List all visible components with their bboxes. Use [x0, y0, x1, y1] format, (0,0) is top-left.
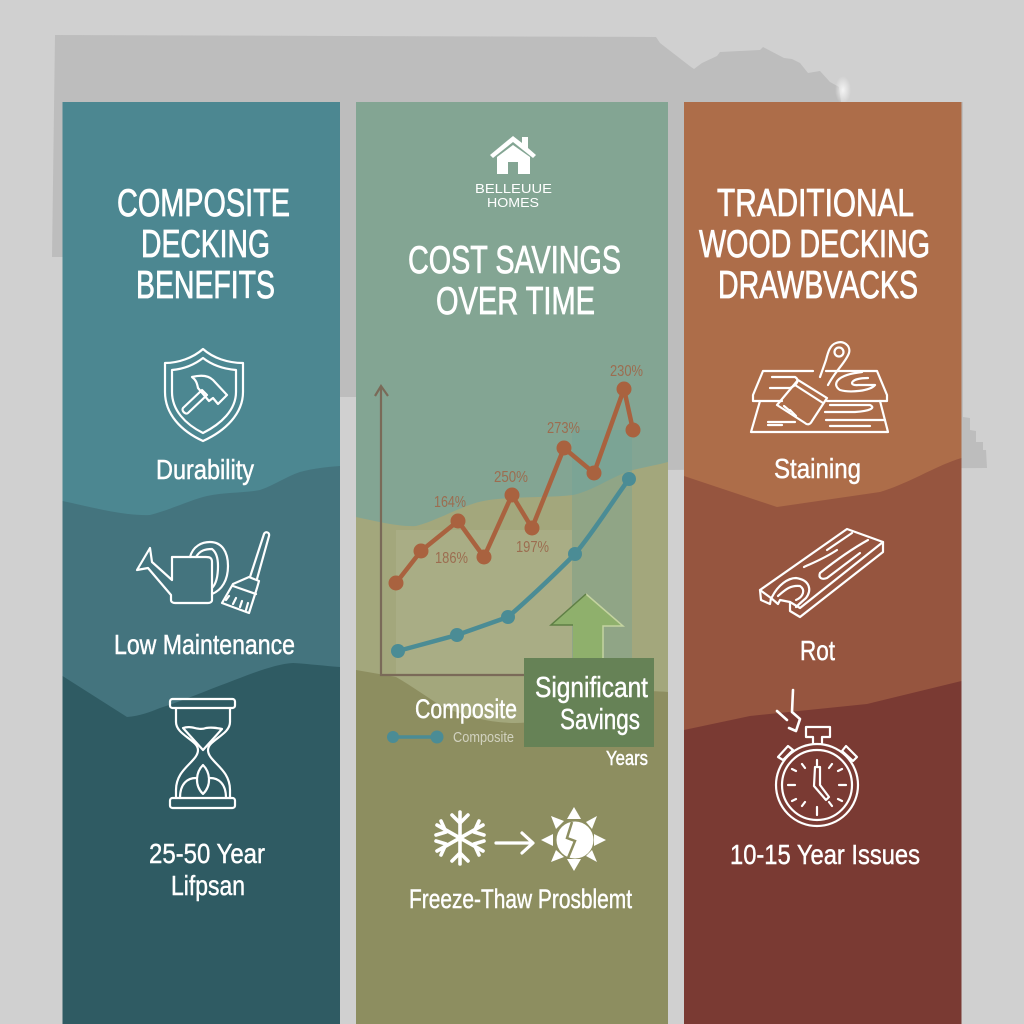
icon: shield with hammer — [165, 349, 243, 441]
logo: belleuue homes: HOMES — [487, 195, 539, 210]
data labels — [434, 363, 643, 567]
label: staining: Staining — [774, 453, 861, 484]
legend: composite: Composite — [415, 694, 517, 724]
data labels: 230% — [610, 363, 643, 380]
callout: significant savings: Savings — [560, 704, 640, 736]
callout: significant savings — [524, 658, 654, 747]
heading: cost savings over time: COST SAVINGS — [408, 239, 621, 282]
icon: stopwatch with crack — [776, 690, 858, 826]
icon: watering can and broom — [137, 532, 269, 613]
data labels: 197% — [516, 539, 549, 556]
heading: cost savings over time — [408, 239, 621, 323]
label: lifespan: Lifpsan — [171, 870, 245, 901]
heading: traditional wood decking drawbacks: TRADITIONAL — [717, 182, 914, 225]
legend: composite: Composite — [453, 729, 514, 746]
icon: cracked sun — [541, 807, 606, 871]
axis label: years: Years — [606, 748, 648, 770]
label: rot: Rot — [800, 635, 835, 666]
arrow: freeze to thaw — [496, 833, 533, 853]
label: lifespan: 25-50 Year — [149, 838, 265, 869]
background map silhouette — [52, 35, 987, 470]
heading: traditional wood decking drawbacks: WOOD DECKING — [699, 223, 930, 266]
chart axes — [375, 386, 526, 675]
heading: cost savings over time: OVER TIME — [436, 280, 595, 323]
panel: composite decking benefits — [62, 102, 340, 1024]
line: wood cost — [388, 382, 640, 590]
heading: composite decking benefits: COMPOSITE — [117, 182, 290, 225]
chart: cost over time lines — [375, 363, 643, 675]
label: issues: 10-15 Year Issues — [730, 839, 920, 870]
heading: traditional wood decking drawbacks — [699, 182, 930, 307]
line: composite cost — [391, 472, 636, 658]
heading: composite decking benefits — [117, 182, 290, 307]
data labels: 250% — [494, 469, 528, 486]
data labels: 273% — [547, 420, 580, 437]
icon: stained planks with brush — [751, 342, 888, 432]
icon: rotted plank — [760, 529, 883, 617]
data labels: 164% — [434, 494, 466, 511]
data labels: 186% — [435, 550, 468, 567]
legend: composite — [387, 694, 517, 746]
heading: composite decking benefits: BENEFITS — [136, 264, 275, 307]
callout: significant savings: Significant — [535, 672, 648, 704]
panel: cost savings over time — [356, 102, 668, 1024]
icon: snowflake — [436, 812, 484, 864]
panel: traditional wood decking drawbacks — [684, 102, 962, 1024]
logo: belleuue homes — [475, 136, 552, 210]
label: freeze-thaw problem: Freeze-Thaw Prosblemt — [409, 884, 632, 914]
icon: hourglass with leaf — [170, 699, 235, 808]
arrow: savings up — [551, 594, 623, 664]
heading: traditional wood decking drawbacks: DRAWBVACKS — [718, 264, 918, 307]
heading: composite decking benefits: DECKING — [141, 223, 270, 266]
icon: snowflake to cracked sun — [436, 807, 606, 871]
label: durability: Durability — [156, 454, 254, 485]
logo: belleuue homes: BELLEUUE — [475, 181, 552, 196]
label: lifespan — [149, 838, 265, 901]
label: low maintenance: Low Maintenance — [114, 629, 295, 660]
